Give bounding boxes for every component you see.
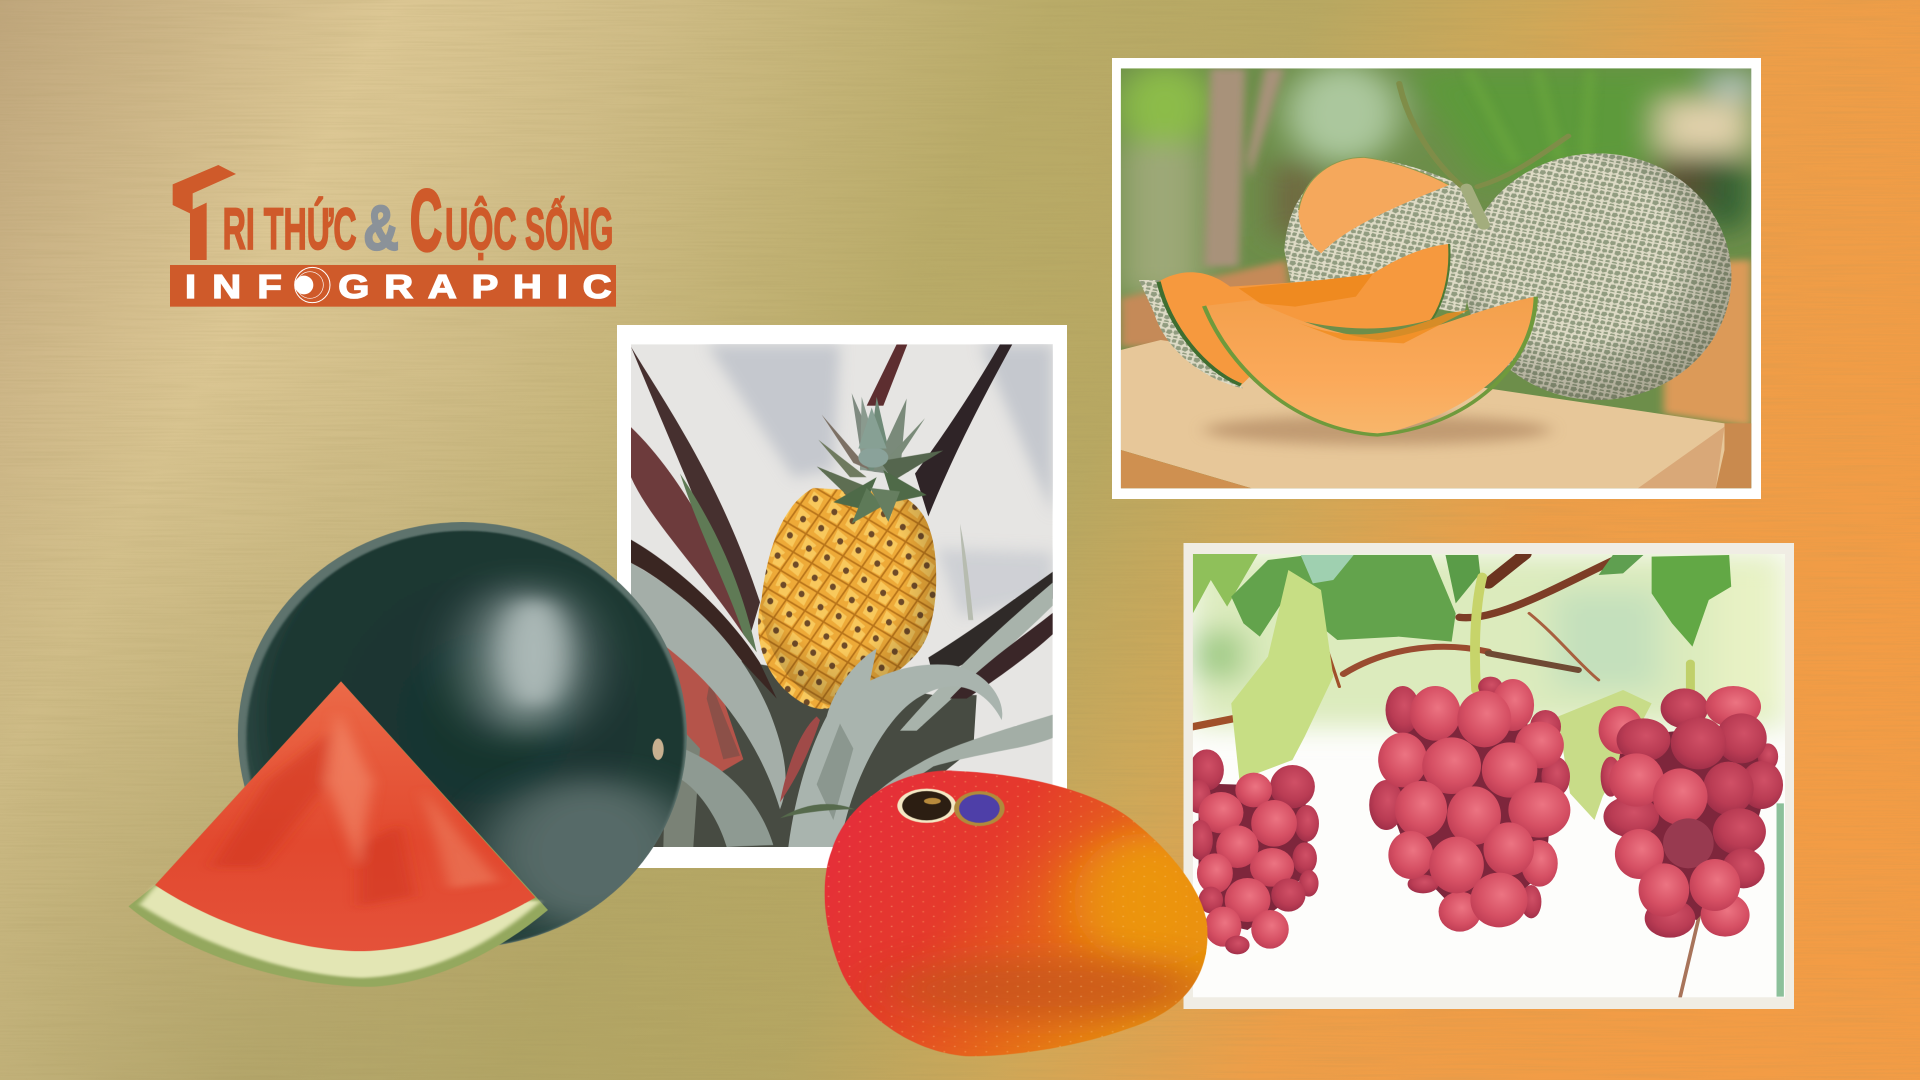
- logo text: Cuộc Sống: [410, 173, 613, 269]
- logo letter T: [173, 165, 236, 260]
- grape leaves: [1193, 554, 1731, 820]
- right grape bunch: [1599, 686, 1783, 938]
- cutting board: [1121, 340, 1751, 488]
- mango with stickers: [815, 767, 1228, 1060]
- logo text: Cuộc Sống: C: [410, 173, 442, 269]
- logo banner: [170, 265, 616, 307]
- grey front leaves: [631, 563, 1053, 847]
- logo text: Cuộc Sống: SỐNG: [525, 196, 613, 262]
- watermelon slice: [128, 681, 548, 987]
- whole watermelon: [238, 522, 695, 948]
- dark base foliage: [653, 647, 977, 847]
- logo banner: GRAPHIC: [338, 268, 612, 305]
- melon stem: [1399, 83, 1568, 225]
- cut cantaloupe half: [1284, 157, 1482, 313]
- front melon slice: [1204, 297, 1536, 435]
- whole cantaloupe: [1464, 153, 1731, 400]
- blurred garden backdrop: [1117, 63, 1751, 488]
- logo text: Rí Thức: RI THỨC: [223, 196, 357, 262]
- bright backdrop and vine: [1193, 554, 1785, 997]
- pineapple fruit: [758, 488, 936, 710]
- pineapple crown: [817, 393, 943, 524]
- left grape bunch: [1186, 749, 1319, 954]
- logo ampersand: &: [363, 194, 399, 264]
- mango body: [815, 767, 1228, 1060]
- logo banner: INF: [185, 268, 282, 305]
- grape stems: [1475, 577, 1690, 717]
- middle grape bunch: [1369, 677, 1570, 932]
- sticker: gold circle: [897, 789, 956, 823]
- logo text: Cuộc Sống: UỘC: [445, 195, 517, 262]
- panel: pineapple photo: [617, 325, 1067, 868]
- back melon slice: [1139, 244, 1449, 388]
- panel: red grapes photo: [1184, 543, 1794, 1009]
- white wall backdrop: [631, 344, 1053, 785]
- black watermelon with slice: [128, 522, 695, 987]
- sticker: purple circle: [954, 791, 1005, 826]
- panel: melon photo: [1112, 58, 1761, 499]
- red and green spiked leaves: [631, 344, 1053, 731]
- logo: Tri Thức & Cuộc Sống Infographic: [170, 165, 616, 307]
